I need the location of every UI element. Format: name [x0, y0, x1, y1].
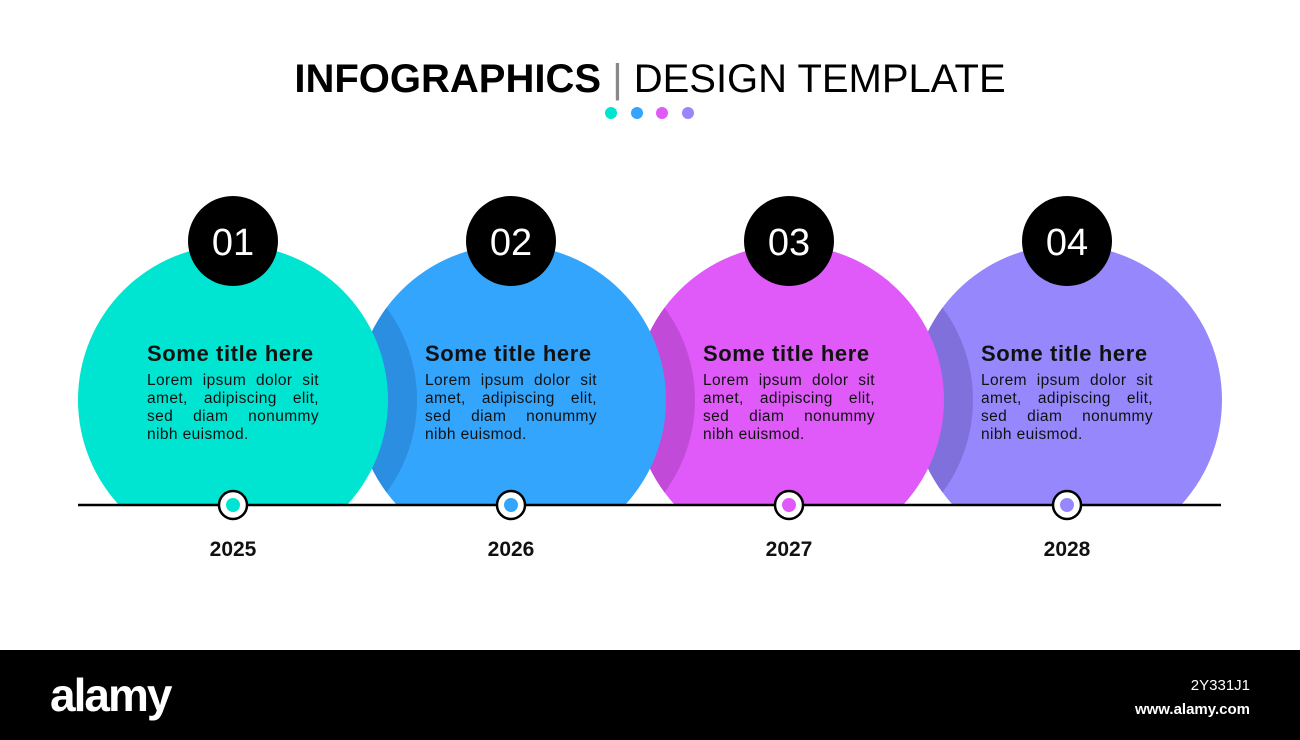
step 2 circle — [372, 251, 666, 504]
text block 4: sed diam nonummy — [981, 408, 1153, 425]
text block 1: sed diam nonummy — [147, 408, 319, 425]
year 2027: 2027 — [766, 538, 812, 561]
text block 2: Lorem ipsum dolor sit — [425, 372, 597, 389]
text block 4: Lorem ipsum dolor sit — [981, 372, 1153, 389]
text block 2 — [425, 341, 597, 443]
number badges: 03 — [768, 222, 810, 264]
text block 2: Some title here — [425, 341, 592, 366]
text block 4: nibh euismod. — [981, 426, 1083, 443]
text block 1: Lorem ipsum dolor sit — [147, 372, 319, 389]
number badges: 02 — [490, 222, 532, 264]
text block 2: nibh euismod. — [425, 426, 527, 443]
decorative dots — [78, 107, 1222, 520]
text block 2: sed diam nonummy — [425, 408, 597, 425]
year 2028: 2028 — [1044, 538, 1090, 561]
timeline markers — [219, 491, 1081, 519]
footer id: www.alamy.com — [1135, 701, 1250, 718]
text block 3: Some title here — [703, 341, 870, 366]
footer logo: alamy — [50, 669, 170, 721]
text block 3: nibh euismod. — [703, 426, 805, 443]
text block 3: sed diam nonummy — [703, 408, 875, 425]
year 2025: 2025 — [210, 538, 256, 561]
title: INFOGRAPHICS | DESIGN TEMPLATE — [294, 57, 1006, 101]
step 3 circle — [650, 251, 944, 504]
text block 2: amet, adipiscing elit, — [425, 390, 597, 407]
year 2026: 2026 — [488, 538, 534, 561]
text block 4 — [981, 341, 1153, 443]
text block 3: amet, adipiscing elit, — [703, 390, 875, 407]
timeline — [78, 504, 1221, 506]
step 4 circle — [928, 251, 1222, 504]
text block 1: Some title here — [147, 341, 314, 366]
number badges: 04 — [1046, 222, 1088, 264]
text block 4: amet, adipiscing elit, — [981, 390, 1153, 407]
footer bar — [0, 650, 1300, 740]
footer id — [1135, 677, 1250, 718]
text block 1 — [147, 341, 319, 443]
text block 1: nibh euismod. — [147, 426, 249, 443]
text block 3: Lorem ipsum dolor sit — [703, 372, 875, 389]
number badges: 01 — [212, 222, 254, 264]
text block 4: Some title here — [981, 341, 1148, 366]
step 1 circle — [78, 251, 388, 504]
text block 3 — [703, 341, 875, 443]
text block 1: amet, adipiscing elit, — [147, 390, 319, 407]
number badges — [188, 196, 1112, 286]
footer id: 2Y331J1 — [1191, 677, 1250, 694]
